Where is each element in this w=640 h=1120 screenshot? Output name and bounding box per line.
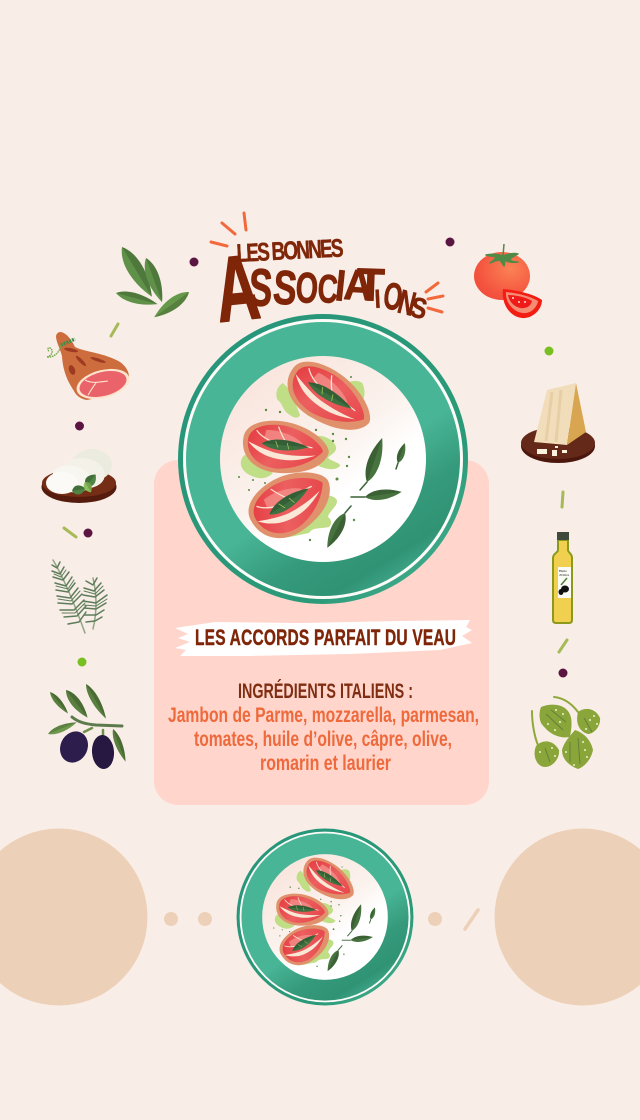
title: les bonnes associations: C xyxy=(317,267,339,312)
title: les bonnes associations: O xyxy=(381,274,405,319)
brush banner with subtitle xyxy=(175,620,472,656)
title: les bonnes associations: O xyxy=(295,263,319,313)
icon: olive oil bottle xyxy=(553,532,572,623)
icon: olive branch xyxy=(47,682,129,770)
icon: parma ham xyxy=(47,332,133,404)
icon: capers xyxy=(532,697,600,769)
carousel left placeholder circle xyxy=(0,828,148,1006)
title: les bonnes associations: A xyxy=(343,260,374,310)
text block: italian ingredients: romarin et laurier xyxy=(260,752,391,775)
title: les bonnes associations: N xyxy=(394,284,419,324)
brush banner with subtitle: LES ACCORDS PARFAIT DU VEAU xyxy=(195,626,456,651)
title: les bonnes associations: I xyxy=(374,285,381,315)
title: les bonnes associations xyxy=(210,234,430,342)
icon: laurel leaves xyxy=(115,243,192,322)
decorative dots and dashes xyxy=(64,238,568,678)
small plate thumbnail xyxy=(237,829,413,1005)
text block: italian ingredients: tomates, huile d’olive, câpre, olive, xyxy=(194,728,452,751)
title: les bonnes associations: T xyxy=(356,258,386,311)
icon: olive oil bottle: d'Olive xyxy=(559,573,570,577)
text block: italian ingredients: Jambon de Parme, mozzarella, parmesan, xyxy=(168,704,479,727)
icon: rosemary xyxy=(52,560,107,633)
title: les bonnes associations: A xyxy=(210,236,264,342)
icon: parmesan on wooden board xyxy=(521,383,595,463)
text block: italian ingredients xyxy=(168,680,479,775)
main plate with veal toasts xyxy=(178,314,468,604)
title: les bonnes associations: S xyxy=(408,290,430,326)
icon: olive oil bottle: Huile xyxy=(559,569,567,573)
title: les bonnes associations: LES BONNES xyxy=(236,234,344,268)
icon: tomato xyxy=(474,244,542,318)
panel: pink ingredients card xyxy=(154,460,489,805)
carousel right placeholder circle xyxy=(494,828,640,1006)
icon: mozzarella on wooden board xyxy=(42,449,116,503)
title: les bonnes associations: I xyxy=(333,261,348,311)
carousel small markers xyxy=(164,910,478,929)
title: les bonnes associations: S xyxy=(247,257,274,318)
text block: italian ingredients: INGRÉDIENTS ITALIENS : xyxy=(238,680,413,703)
title: les bonnes associations: S xyxy=(271,260,299,315)
title sunburst rays xyxy=(211,213,443,312)
